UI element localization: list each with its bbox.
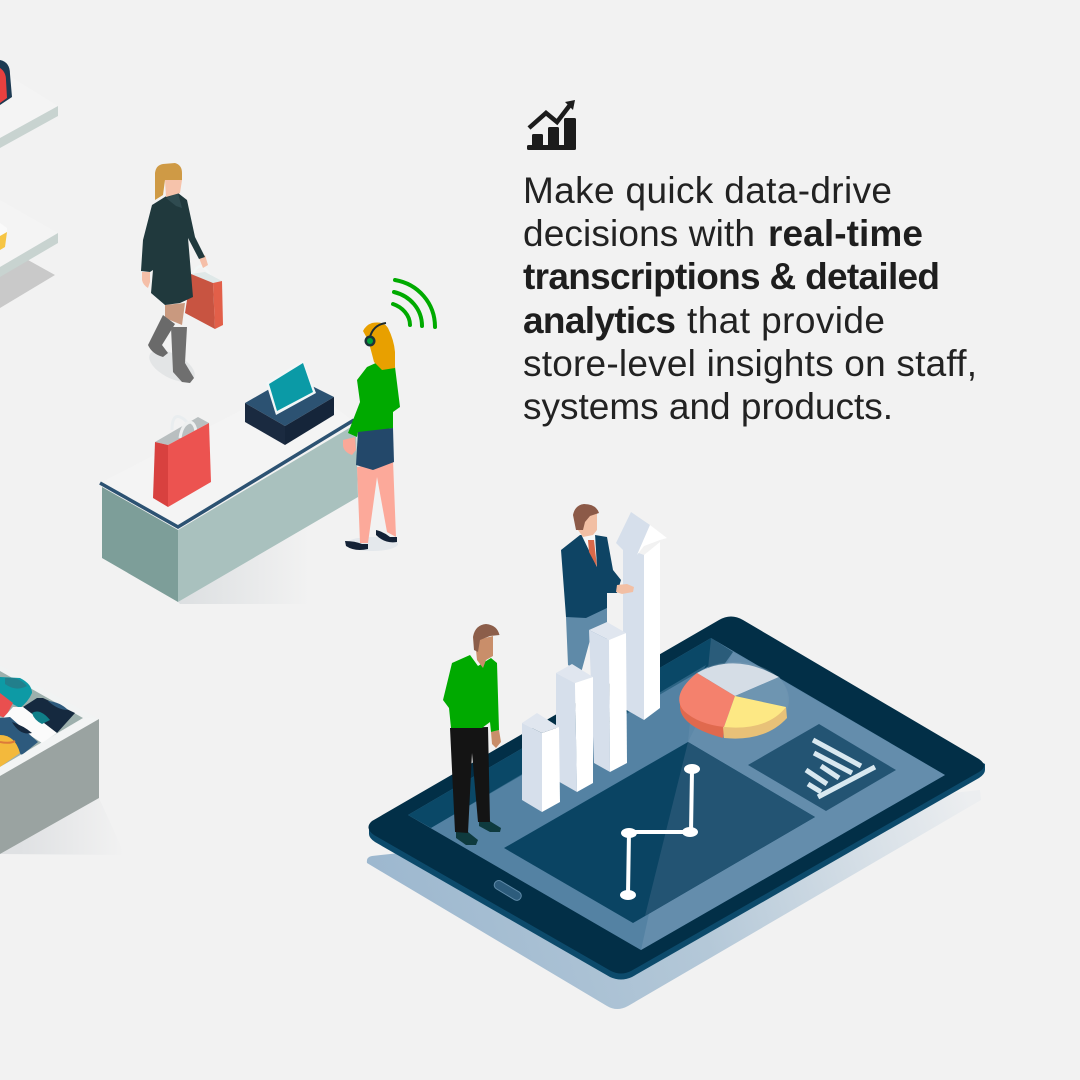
growth arrow: [616, 512, 667, 720]
counter: [100, 380, 358, 604]
text block: description: store-level insights on staff,: [523, 343, 977, 384]
text block: description: analytics: [523, 300, 676, 341]
shadow under shopper: [144, 344, 200, 388]
text block: description: decisions with: [523, 213, 755, 254]
person: woman shopper: [141, 163, 223, 388]
tablet body: [368, 616, 985, 980]
bar 1: [522, 713, 560, 812]
pie chart: [679, 662, 789, 739]
payment terminal box with tablet: [245, 360, 334, 445]
tablet screen: [408, 638, 945, 950]
bar 3: [589, 622, 627, 772]
person: man in suit: [561, 504, 634, 618]
text block: description: systems and products.: [523, 386, 893, 427]
red shopping bag: [153, 417, 211, 507]
main dark panel: [504, 742, 815, 923]
person: cashier with headset: [343, 323, 400, 551]
man in suit, legs: [566, 608, 607, 673]
mini bar chart panel: [748, 724, 896, 811]
text block: description: that provide: [687, 300, 885, 341]
icon: growth chart: [527, 100, 576, 150]
icon: bag on shelf: [0, 60, 12, 105]
icon: green signal waves: [393, 280, 435, 327]
top-left shelves: [0, 60, 58, 308]
tablet shadow: [367, 790, 981, 1009]
person: man in green sweater: [443, 624, 501, 845]
text block: description: real-time: [768, 213, 923, 254]
bar 2: [556, 664, 593, 792]
text block: description: transcriptions & detailed: [523, 256, 940, 297]
line chart on panel: [620, 764, 700, 900]
tablet home button: [493, 879, 523, 902]
bottom-left sock drawer: [0, 665, 125, 855]
icon: headset: [364, 323, 386, 346]
bar chart columns and arrow: [522, 512, 667, 812]
tablet device: [368, 512, 985, 980]
text block: description: [523, 170, 977, 427]
text block: description: Make quick data-drive: [523, 170, 892, 211]
shopping bag held: [185, 266, 223, 329]
